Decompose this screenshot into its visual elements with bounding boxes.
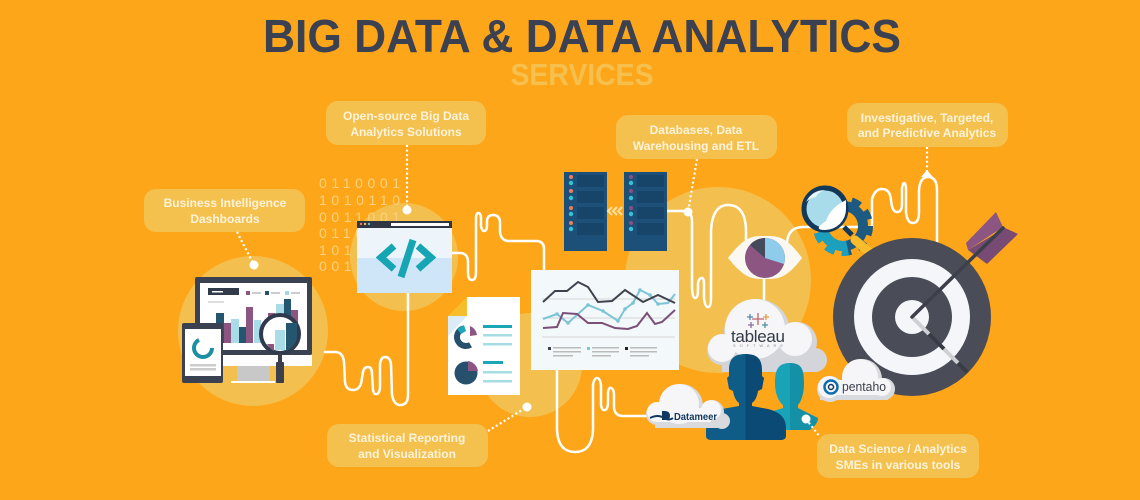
datameer logo mark (650, 411, 673, 420)
callout: Databases, Data Warehousing and ETL: Databases, Data (650, 123, 743, 137)
callout: Data Science / Analytics SMEs in various tools: SMEs in various tools (836, 458, 961, 472)
binary digits (319, 175, 405, 274)
icon: dashboard monitor and tablet (182, 277, 312, 383)
binary digits: 0110001 (319, 175, 405, 191)
subtitle: SERVICES (510, 57, 654, 92)
callout: Databases, Data Warehousing and ETL (616, 115, 777, 159)
callout: Statistical Reporting and Visualization (327, 424, 488, 467)
callout: Investigative, Targeted, and Predictive Analytics: and Predictive Analytics (858, 126, 996, 140)
icon: gear (816, 199, 870, 253)
callout: Data Science / Analytics SMEs in various tools (817, 434, 979, 478)
tableau logo mark (747, 313, 769, 328)
pentaho logo mark (824, 380, 838, 394)
icon: magnifying glass (804, 188, 875, 257)
icon: database servers (564, 172, 667, 251)
binary digits: 0011 (319, 258, 368, 274)
icon: target with arrow (833, 212, 1018, 396)
icon: navy person (706, 354, 786, 440)
callout: Investigative, Targeted, and Predictive Analytics (847, 103, 1008, 147)
data science dot (802, 414, 820, 437)
pentaho wordmark: pentaho (842, 379, 886, 394)
callout: Open-source Big Data Analytics Solutions: Open-source Big Data (343, 109, 469, 123)
icon: eye with pie chart (728, 236, 802, 279)
binary digits: 0011001 (319, 209, 405, 225)
callout: Business Intelligence Dashboards: Dashboards (190, 212, 260, 226)
cloud: Datameer (646, 384, 730, 429)
icon: teal person (767, 363, 818, 430)
callout: Business Intelligence Dashboards: Business Intelligence (164, 196, 287, 210)
dotted leaders and dots (237, 145, 933, 431)
icon: report document (448, 297, 520, 395)
callout: Statistical Reporting and Visualization: and Visualization (358, 447, 456, 461)
background circles (178, 187, 811, 417)
callout: Business Intelligence Dashboards (144, 189, 305, 232)
callout: Open-source Big Data Analytics Solutions: Analytics Solutions (350, 125, 462, 139)
datameer wordmark: Datameer (674, 412, 717, 423)
title: BIG DATA & DATA ANALYTICS (263, 10, 901, 62)
binary digits: 0110 (319, 225, 368, 241)
callout: Data Science / Analytics SMEs in various tools: Data Science / Analytics (829, 442, 967, 456)
tableau wordmark: tableau (731, 327, 785, 346)
callout: Investigative, Targeted, and Predictive Analytics: Investigative, Targeted, (861, 111, 993, 125)
icon: dashboard magnifier (261, 315, 299, 383)
binary digits: 1010 (319, 242, 369, 258)
callout: Statistical Reporting and Visualization: Statistical Reporting (349, 431, 465, 445)
cloud: Pentaho (817, 359, 895, 402)
binary digits: 1010110 (319, 192, 405, 208)
tableau small tagline: SOFTWARE (733, 343, 783, 348)
line chart panel (531, 270, 679, 370)
callout: Databases, Data Warehousing and ETL: Warehousing and ETL (633, 139, 759, 153)
cloud: Tableau (707, 299, 827, 372)
icon: code window (357, 221, 452, 293)
callout: Open-source Big Data Analytics Solutions (326, 101, 486, 145)
connector wires (325, 177, 937, 452)
